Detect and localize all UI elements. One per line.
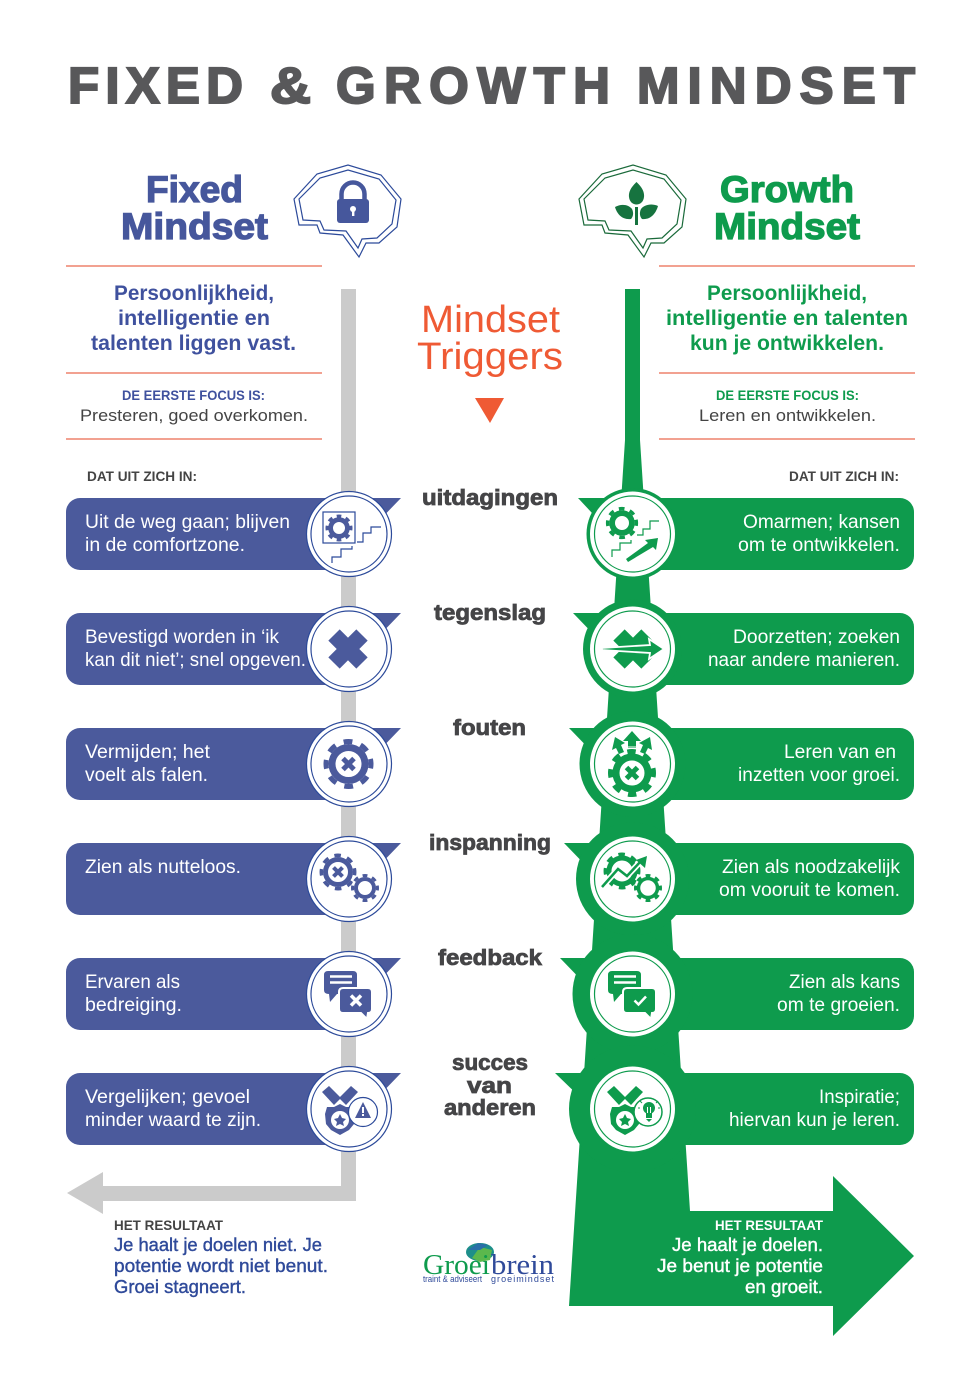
text: Vermijden; het xyxy=(85,742,211,763)
logo: Groeibrein: Groei xyxy=(423,1250,490,1281)
row 6 growth xyxy=(555,1046,914,1172)
text: fixed result: potentie wordt niet benut. xyxy=(114,1256,328,1276)
text xyxy=(85,972,182,1016)
text: minder waard te zijn. xyxy=(85,1110,261,1131)
label: succes van anderen: van xyxy=(467,1073,512,1098)
grey fixed path with arrow xyxy=(67,289,356,1214)
label: dat uit zich in left: DAT UIT ZICH IN: xyxy=(87,468,197,484)
text: bedreiging. xyxy=(85,995,182,1016)
text: Zien als kans xyxy=(789,972,900,993)
heading: fixed mindset: Fixed xyxy=(146,169,243,210)
title: MINDSET xyxy=(637,57,915,114)
text: Omarmen; kansen xyxy=(743,512,900,533)
label: fouten: fouten xyxy=(453,715,526,740)
icon: brain bubble with lock xyxy=(294,165,401,257)
row 6 fixed xyxy=(66,1066,401,1152)
text: fixed result xyxy=(114,1217,328,1297)
text: fixed result: Je haalt je doelen niet. Je xyxy=(114,1235,322,1255)
text: Zien als nutteloos. xyxy=(85,857,241,878)
text: growth result: en groeit. xyxy=(745,1277,823,1297)
row 4 growth xyxy=(564,822,914,936)
text: Leren van en xyxy=(784,742,896,763)
heading: triggers: Triggers xyxy=(417,336,563,378)
text xyxy=(777,972,900,1016)
text xyxy=(85,742,211,786)
text: growth result: Je haalt je doelen. xyxy=(672,1235,823,1255)
text: fixed statement: talenten liggen vast. xyxy=(91,332,296,355)
text xyxy=(729,1087,900,1131)
heading: growth mindset xyxy=(714,169,860,247)
label: succes van anderen xyxy=(444,1050,536,1120)
row 1 growth xyxy=(578,488,914,580)
icon: medal with light bulb xyxy=(607,1086,662,1135)
text: growth result xyxy=(657,1217,823,1297)
icon: gear, stairs, arrow xyxy=(608,509,659,562)
divider lines xyxy=(66,266,915,439)
title: & xyxy=(270,57,311,114)
icon: speech bubbles with cross xyxy=(324,971,372,1019)
text: fixed result: HET RESULTAAT xyxy=(114,1217,223,1233)
text: fixed statement: intelligentie en xyxy=(118,307,270,330)
heading: growth mindset: Growth xyxy=(720,169,854,210)
icon: two gears with rising arrow xyxy=(602,854,660,900)
label: inspanning: inspanning xyxy=(429,830,551,855)
text: om te ontwikkelen. xyxy=(738,535,900,556)
title: FIXED xyxy=(68,57,243,114)
text: kan dit niet’; snel opgeven. xyxy=(85,650,306,671)
label: tegenslag: tegenslag xyxy=(434,600,546,625)
text: growth result: HET RESULTAAT xyxy=(715,1217,823,1233)
text: fixed statement: Persoonlijkheid, xyxy=(114,282,274,305)
label: uitdagingen: uitdagingen xyxy=(422,485,558,510)
text: inzetten voor groei. xyxy=(738,765,900,786)
green growth path with arrow xyxy=(569,289,914,1336)
text: Doorzetten; zoeken xyxy=(733,627,900,648)
heading: triggers xyxy=(417,299,563,378)
icon: gear with cross xyxy=(326,742,371,786)
heading: fixed mindset xyxy=(121,169,268,247)
heading: fixed mindset: Mindset xyxy=(121,206,268,247)
text xyxy=(708,627,900,671)
row 3 growth xyxy=(569,711,914,817)
row 3 fixed xyxy=(66,722,401,806)
text: Ervaren als xyxy=(85,972,180,993)
text xyxy=(738,512,900,556)
icon: gear in box with stairs xyxy=(323,512,381,563)
row 5 growth xyxy=(560,934,914,1054)
text xyxy=(738,742,900,786)
text xyxy=(719,857,901,901)
text: om te groeien. xyxy=(777,995,900,1016)
text: Zien als noodzakelijk xyxy=(722,857,901,878)
logo: Groeibrein: brein xyxy=(491,1250,554,1281)
text: growth result: Je benut je potentie xyxy=(657,1256,823,1276)
text: fixed result: Groei stagneert. xyxy=(114,1277,246,1297)
title xyxy=(68,57,915,114)
row 2 fixed xyxy=(66,606,401,692)
heading: growth mindset: Mindset xyxy=(714,206,860,247)
label: dat uit zich in right: DAT UIT ZICH IN: xyxy=(789,468,899,484)
text: growth statement: kun je ontwikkelen. xyxy=(690,332,884,355)
text: growth focus: DE EERSTE FOCUS IS: xyxy=(716,387,859,403)
text: Inspiratie; xyxy=(819,1087,900,1108)
label: succes van anderen: anderen xyxy=(444,1095,536,1120)
text xyxy=(85,627,306,671)
icon: medal with warning xyxy=(322,1086,378,1135)
row 5 fixed xyxy=(66,952,401,1036)
text: growth statement: Persoonlijkheid, xyxy=(707,282,867,305)
text: hiervan kun je leren. xyxy=(729,1110,900,1131)
text: growth statement xyxy=(666,282,908,355)
text: om vooruit te komen. xyxy=(719,880,900,901)
row 4 fixed xyxy=(66,836,401,922)
icon: triggers down triangle xyxy=(475,398,504,423)
icon: cross xyxy=(334,635,362,663)
text: Uit de weg gaan; blijven xyxy=(85,512,290,533)
icon: gear with up arrows xyxy=(610,731,654,794)
icon: brain bubble with plant xyxy=(579,165,686,257)
text: fixed focus xyxy=(80,387,308,425)
text: fixed statement xyxy=(91,282,296,355)
text: fixed focus: DE EERSTE FOCUS IS: xyxy=(122,387,265,403)
heading: triggers: Mindset xyxy=(421,299,560,341)
text: Bevestigd worden in ‘ik xyxy=(85,627,279,648)
row 2 growth xyxy=(573,600,914,698)
text: fixed focus: Presteren, goed overkomen. xyxy=(80,406,308,425)
text: Vergelijken; gevoel xyxy=(85,1087,250,1108)
icon: two gears with cross xyxy=(321,855,378,900)
title: GROWTH xyxy=(336,57,610,114)
row 1 fixed xyxy=(66,492,401,576)
text: growth focus: Leren en ontwikkelen. xyxy=(699,406,876,425)
text: voelt als falen. xyxy=(85,765,208,786)
text: growth focus xyxy=(699,387,876,425)
icon: speech bubbles with check xyxy=(608,971,656,1019)
label: feedback: feedback xyxy=(438,945,543,970)
logo: Groeibrein: groeimindset xyxy=(491,1274,554,1284)
text: naar andere manieren. xyxy=(708,650,900,671)
logo: Groeibrein xyxy=(423,1243,554,1284)
text: growth statement: intelligentie en talenten xyxy=(666,307,908,330)
text xyxy=(85,512,290,556)
text: in de comfortzone. xyxy=(85,535,245,556)
icon: cross with arrow through xyxy=(602,635,664,663)
label: succes van anderen: succes xyxy=(452,1050,528,1075)
logo: Groeibrein: traint & adviseert xyxy=(423,1274,482,1284)
text xyxy=(85,1087,261,1131)
